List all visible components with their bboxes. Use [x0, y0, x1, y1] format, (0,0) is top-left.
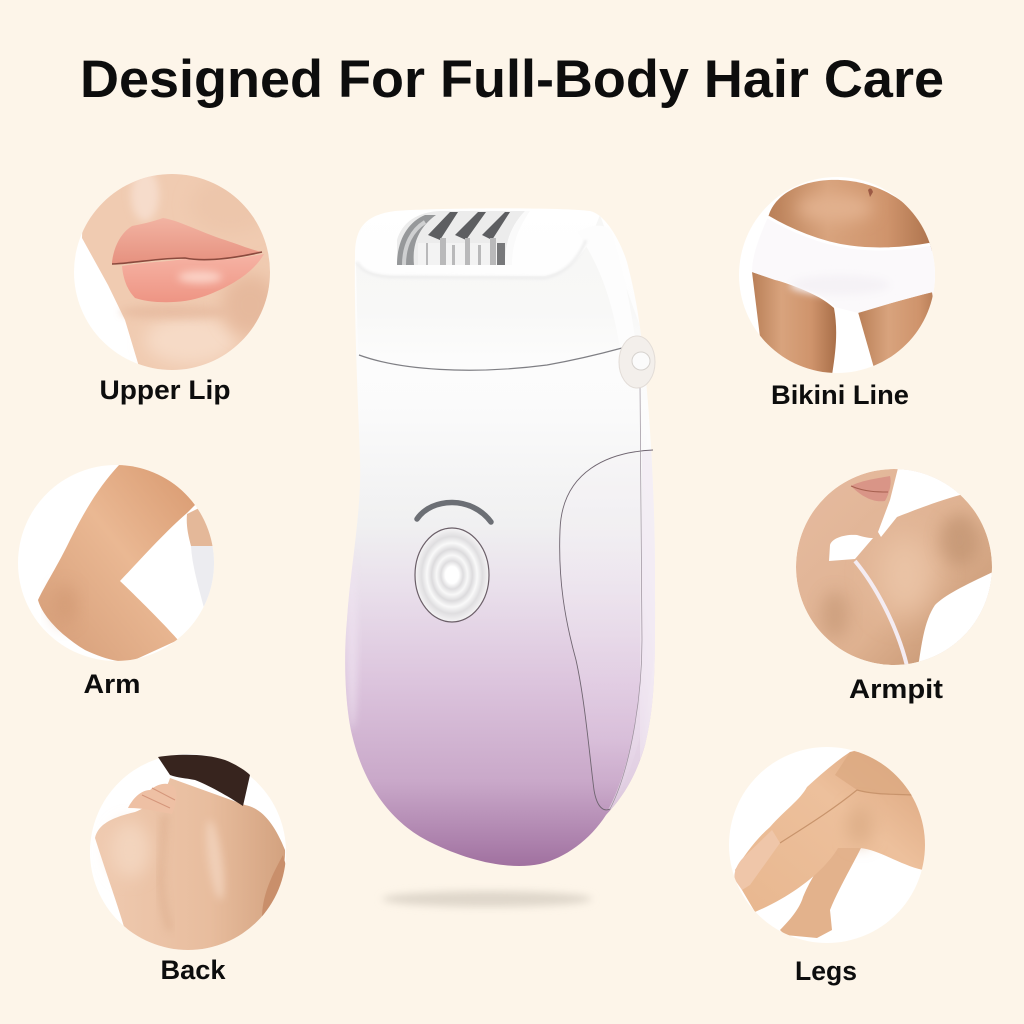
label: arm: Arm — [84, 669, 140, 699]
label: upper lip: Upper Lip — [100, 375, 230, 405]
white gap under chin — [829, 535, 873, 561]
comb discs — [397, 211, 525, 265]
panel: upper lip — [74, 169, 278, 405]
epilator head — [357, 211, 586, 278]
label: bikini line: Bikini Line — [771, 380, 909, 410]
panel: armpit — [796, 460, 1000, 704]
image: armpit — [796, 460, 1000, 668]
seam — [359, 348, 622, 370]
white area under arm — [919, 572, 992, 662]
panel: legs — [729, 747, 930, 986]
side panel — [574, 648, 640, 754]
indicator arc — [417, 502, 491, 522]
panel: arm — [18, 464, 215, 699]
image: back — [90, 754, 290, 950]
image: arm — [18, 464, 215, 662]
label: legs: Legs — [795, 956, 857, 986]
device shading — [347, 215, 660, 810]
title: Designed For Full-Body Hair Care — [80, 50, 944, 109]
panel lines — [560, 450, 653, 810]
panel: bikini line — [739, 177, 945, 410]
image: lips — [74, 169, 278, 370]
label: armpit: Armpit — [849, 674, 943, 704]
side switch — [619, 336, 655, 388]
shadow — [382, 891, 592, 907]
head cap highlight — [357, 240, 586, 278]
power button — [415, 528, 489, 622]
panel: back — [90, 754, 290, 985]
label: back: Back — [160, 955, 226, 985]
image: bikini — [739, 177, 945, 375]
image: legs — [729, 747, 930, 943]
product: epilator — [345, 208, 660, 866]
white gap right of face — [878, 469, 960, 537]
device body — [345, 208, 655, 866]
